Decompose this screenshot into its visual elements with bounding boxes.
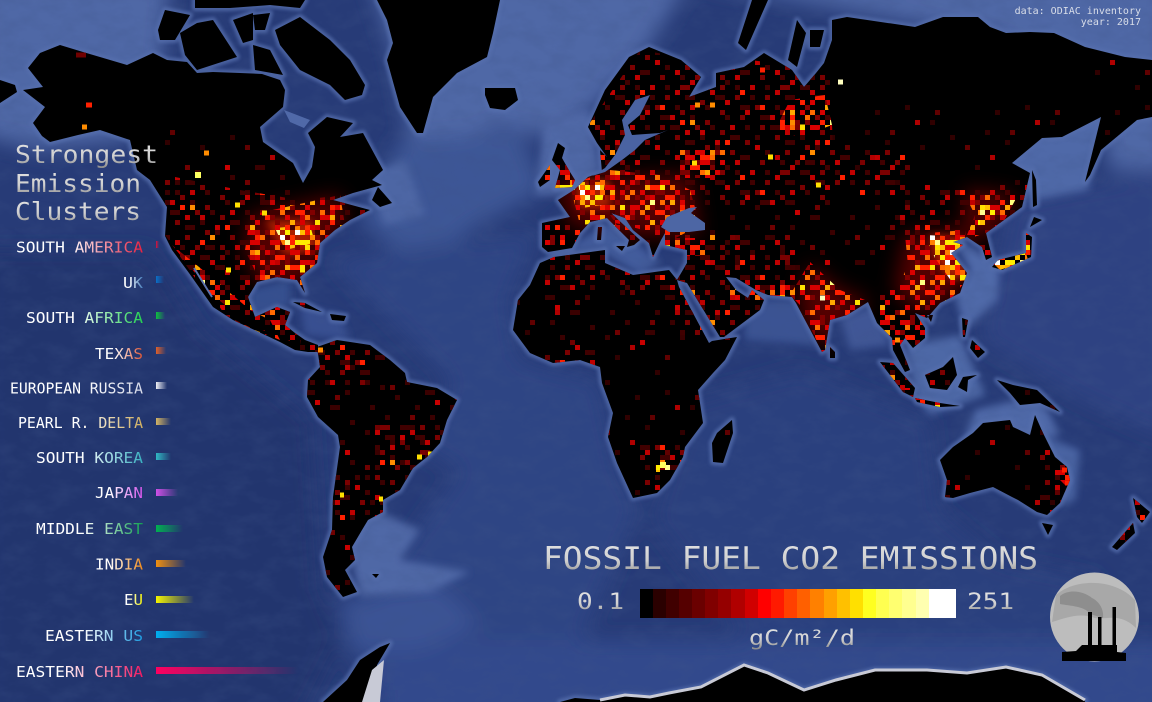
cluster: South Africa: SOUTH AFRICA (26, 309, 143, 327)
cluster: Middle East (36, 520, 183, 538)
heading: fossil fuel CO2 emissions: FOSSIL FUEL CO2 EMISSIONS (543, 541, 1038, 577)
sparse emission cells (160, 60, 1152, 520)
individual hot pixels (195, 175, 666, 465)
glow underlay for strongest regions (245, 175, 1015, 345)
heading: strongest emission clusters: Strongest (15, 140, 158, 169)
data source note: year: 2017 (1081, 17, 1141, 28)
medium emission cells (165, 50, 1152, 550)
scale unit: gC/m²/d (749, 626, 855, 650)
cluster: Middle East: MIDDLE EAST (36, 520, 143, 538)
scale maximum value: 251 (967, 590, 1014, 615)
scale minimum value: 0.1 (577, 590, 624, 615)
cluster: India: INDIA (95, 556, 143, 574)
cluster: European Russia: EUROPEAN RUSSIA (10, 380, 143, 398)
very hot emission cells (275, 175, 1028, 472)
cluster: EU (124, 591, 194, 609)
heading: strongest emission clusters: Clusters (15, 197, 141, 226)
hot emission cells (172, 95, 1070, 490)
inland seas and gulfs (194, 95, 705, 297)
cluster: Eastern China (16, 663, 298, 681)
cluster: Eastern China: EASTERN CHINA (16, 663, 143, 681)
cluster: Japan (95, 484, 178, 502)
cluster: Eastern US: EASTERN US (45, 627, 143, 645)
antarctic peninsula ice (362, 660, 384, 702)
cluster: Texas (95, 345, 166, 363)
icon: factory with smoke (1050, 572, 1139, 662)
cluster: Pearl River Delta: PEARL R. DELTA (18, 414, 143, 432)
cluster: India (95, 556, 186, 574)
cluster: South America: SOUTH AMERICA (16, 238, 143, 256)
cluster: EU: EU (124, 591, 143, 609)
heading: strongest emission clusters (15, 140, 158, 226)
cluster: South Korea: SOUTH KOREA (36, 449, 143, 467)
colour scale bar (640, 589, 956, 618)
data source note: data: ODIAC inventory (1015, 6, 1141, 17)
antarctic ice fringe (600, 665, 1085, 700)
cluster: Japan: JAPAN (95, 484, 143, 502)
cluster ranking legend (10, 238, 298, 681)
cluster: Eastern US (45, 627, 210, 645)
heading: strongest emission clusters: Emission (15, 169, 141, 198)
emission heat grid (76, 50, 1152, 600)
cluster: UK: UK (123, 274, 143, 292)
cluster: Texas: TEXAS (95, 345, 143, 363)
data source note (1015, 6, 1141, 28)
cluster: UK (123, 274, 164, 292)
